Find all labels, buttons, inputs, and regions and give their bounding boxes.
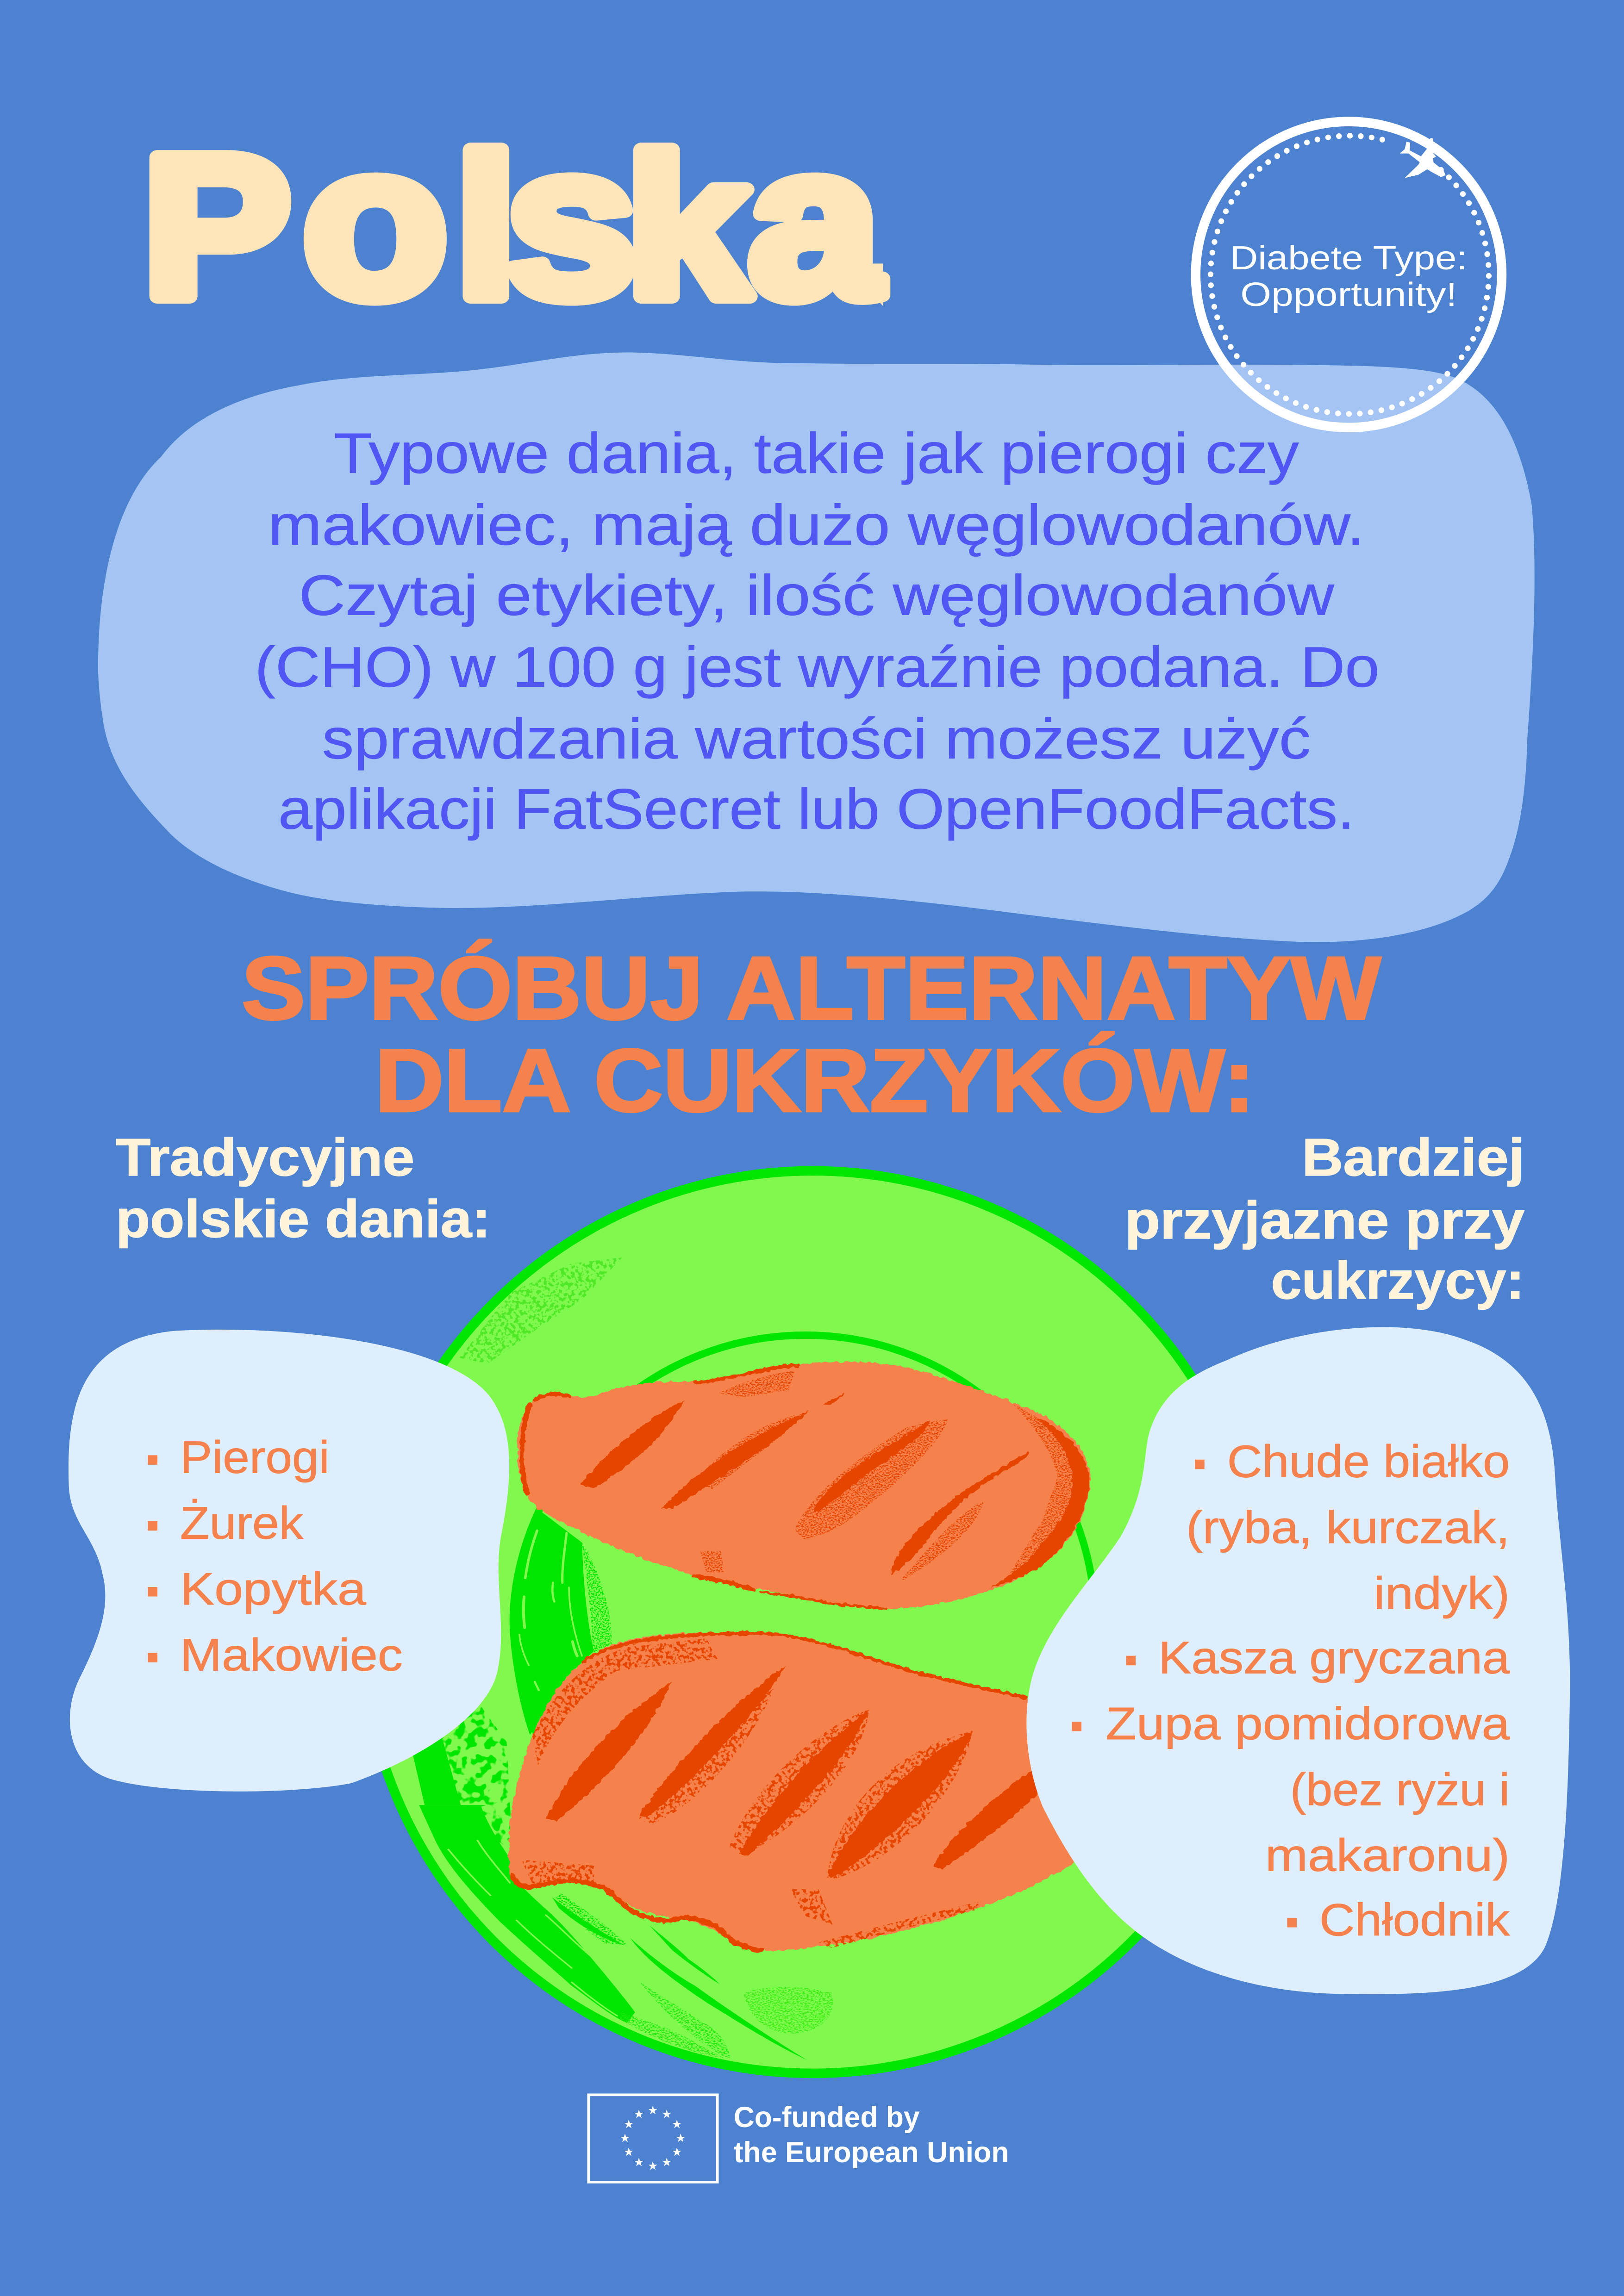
intro text: makowiec, mają dużo węglowodanów. xyxy=(268,493,1365,557)
panel: diabetes friendly list: Zupa pomidorowa xyxy=(1106,1698,1510,1749)
plate xyxy=(356,1166,1269,2078)
plate brush strokes xyxy=(413,1257,833,2060)
title xyxy=(143,101,883,342)
chicken texture: bottom fillet xyxy=(521,1638,981,1948)
panel: diabetes friendly list: makaronu) xyxy=(1265,1830,1510,1881)
subheading: diabetes friendly: przyjazne przy xyxy=(1124,1191,1524,1250)
heading xyxy=(242,938,1381,1130)
icon: airplane xyxy=(1399,138,1446,178)
intro text: (CHO) w 100 g jest wyraźnie podana. Do xyxy=(255,635,1380,699)
panel: diabetes friendly list: Chude białko xyxy=(1227,1436,1510,1487)
panel: diabetes friendly list xyxy=(1026,1327,1570,1994)
intro text: aplikacji FatSecret lub OpenFoodFacts. xyxy=(278,777,1355,841)
intro text xyxy=(255,422,1380,841)
EU funding text: the European Union xyxy=(734,2136,1009,2169)
intro text: Typowe dania, takie jak pierogi czy xyxy=(334,422,1299,485)
title: k xyxy=(626,114,751,340)
title: a xyxy=(748,101,882,342)
panel: diabetes friendly list: (ryba, kurczak, xyxy=(1186,1502,1510,1553)
title: P xyxy=(143,114,291,340)
panel: diabetes friendly list: Kasza gryczana xyxy=(1158,1632,1510,1683)
heading: DLA CUKRZYKÓW: xyxy=(375,1030,1255,1130)
intro text: Czytaj etykiety, ilość węglowodanów xyxy=(299,564,1335,628)
intro text: sprawdzania wartości możesz użyć xyxy=(322,707,1311,771)
badge text: Diabete Type: xyxy=(1230,239,1468,277)
badge text: Opportunity! xyxy=(1240,276,1457,313)
panel: traditional dishes list: Kopytka xyxy=(180,1563,366,1614)
heading: SPRÓBUJ ALTERNATYW xyxy=(242,938,1381,1038)
subheading: diabetes friendly: cukrzycy: xyxy=(1271,1251,1524,1310)
badge text xyxy=(1230,239,1468,313)
logo: EU co-funded xyxy=(588,2095,1009,2182)
subheading: traditional dishes xyxy=(116,1128,491,1249)
chicken texture: top fillet xyxy=(694,1370,1078,1580)
title: l xyxy=(455,114,517,340)
title: s xyxy=(505,101,638,342)
panel: traditional dishes list: Żurek xyxy=(180,1498,304,1549)
subheading: traditional dishes: polskie dania: xyxy=(116,1190,491,1249)
EU flag outline with stars xyxy=(588,2095,718,2182)
subheading: diabetes friendly: Bardziej xyxy=(1302,1128,1524,1187)
EU funding text xyxy=(734,2101,1009,2169)
panel: traditional dishes list: Pierogi xyxy=(180,1431,330,1482)
panel: diabetes friendly list: (bez ryżu i xyxy=(1290,1764,1510,1815)
subheading: traditional dishes: Tradycyjne xyxy=(116,1128,414,1187)
title: o xyxy=(302,101,448,342)
EU funding text: Co-funded by xyxy=(734,2101,919,2134)
chicken: bottom fillet xyxy=(509,1632,1133,1951)
panel: intro text blob xyxy=(98,352,1535,942)
illustration: plate with grilled chicken xyxy=(69,1128,1570,2182)
panel: diabetes friendly list: Chłodnik xyxy=(1319,1894,1510,1945)
badge: Diabete Type Opportunity xyxy=(1196,122,1502,428)
panel: traditional dishes list: Makowiec xyxy=(180,1629,403,1680)
panel: traditional dishes list xyxy=(69,1330,509,1792)
chicken: top fillet xyxy=(517,1362,1090,1609)
subheading: diabetes friendly xyxy=(1124,1128,1524,1310)
panel: diabetes friendly list: indyk) xyxy=(1374,1568,1510,1618)
